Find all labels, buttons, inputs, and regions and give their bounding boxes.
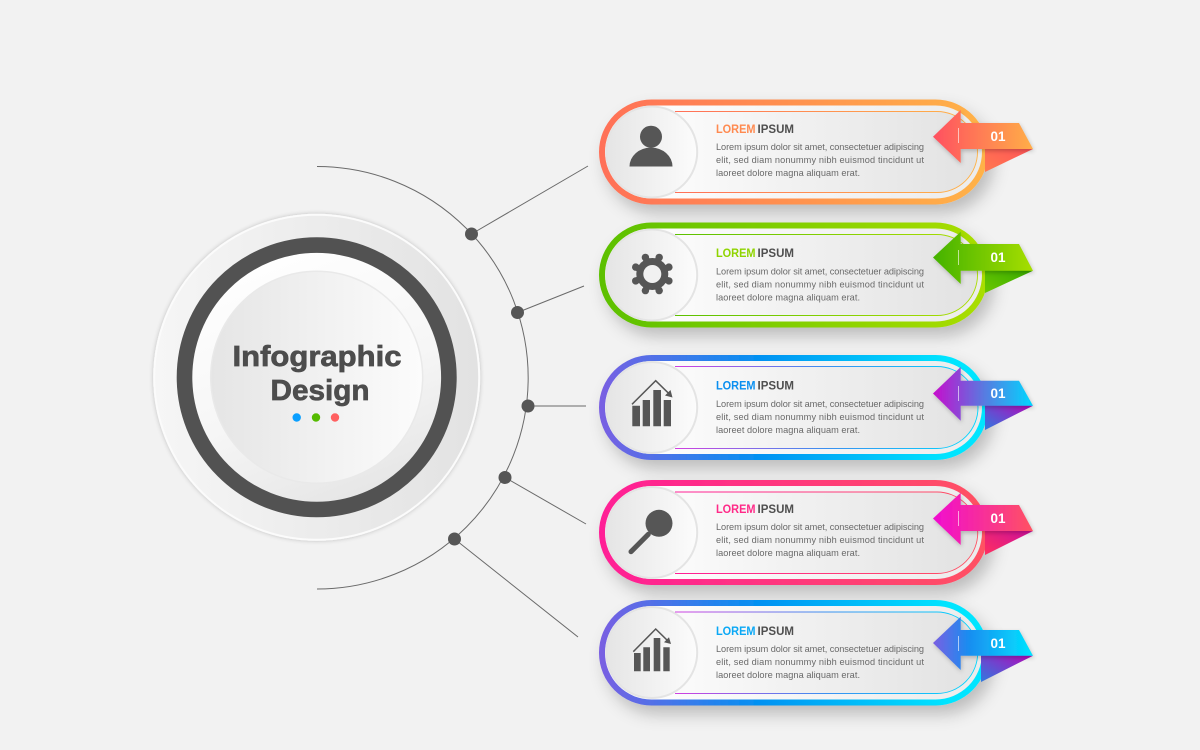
card text: laoreet dolore magna aliquam erat.: [716, 168, 860, 178]
arrow badge: [933, 493, 1033, 555]
heading: Design: [270, 375, 370, 407]
card frame: [599, 355, 988, 460]
card text: laoreet dolore magna aliquam erat.: [716, 425, 860, 435]
connector arc and branches: [317, 166, 588, 637]
arrow badge: [933, 617, 1033, 682]
card frame: [599, 222, 988, 328]
card title: LOREM: [716, 624, 756, 638]
branch lines: [454, 166, 588, 637]
arrow badge: [933, 367, 1033, 430]
card inner: [605, 106, 982, 198]
icon: bar chart: [633, 629, 671, 671]
accent outline: [675, 366, 978, 448]
arrow badge: 01: [990, 511, 1006, 526]
arrow badge: 01: [990, 250, 1006, 265]
dark ring: [185, 245, 449, 510]
card text: elit, sed diam nonummy nibh euismod tincidunt ut: [716, 412, 924, 422]
icon: magnifier: [631, 510, 672, 552]
card inner: [605, 486, 982, 579]
card title: LOREM: [716, 246, 756, 260]
inner disc: [211, 271, 423, 483]
card text: laoreet dolore magna aliquam erat.: [716, 670, 860, 680]
card frame: [599, 480, 988, 585]
icon disc: [606, 362, 697, 453]
icon disc: [606, 487, 697, 578]
outer disc: [154, 215, 479, 540]
panel: card 3: [599, 355, 1033, 460]
card text: elit, sed diam nonummy nibh euismod tincidunt ut: [716, 280, 924, 290]
card title: LOREM: [716, 122, 756, 136]
icon disc: [606, 106, 697, 198]
accent outline: [675, 612, 978, 694]
panel: card 5: [599, 600, 1033, 706]
arrow badge: [933, 232, 1033, 293]
card inner: [605, 228, 982, 322]
icon: bar chart: [632, 381, 672, 426]
card text: elit, sed diam nonummy nibh euismod tincidunt ut: [716, 535, 924, 545]
icon disc: [606, 607, 697, 698]
card title: IPSUM: [758, 122, 794, 136]
dots: [292, 413, 339, 422]
card text: Lorem ipsum dolor sit amet, consectetuer adipiscing: [716, 644, 924, 654]
panel: card 4: [599, 480, 1033, 585]
card text: Lorem ipsum dolor sit amet, consectetuer adipiscing: [716, 522, 924, 532]
card inner: [605, 606, 982, 700]
card title: IPSUM: [758, 502, 794, 516]
central circle: [154, 215, 479, 540]
card title: IPSUM: [758, 624, 794, 638]
arrow badge: 01: [990, 386, 1006, 401]
icon disc: [606, 230, 697, 320]
heading: Infographic: [232, 341, 402, 373]
arrow badge: [933, 110, 1033, 172]
card text: Lorem ipsum dolor sit amet, consectetuer adipiscing: [716, 399, 924, 409]
card text: laoreet dolore magna aliquam erat.: [716, 548, 860, 558]
arrow badge: 01: [990, 636, 1006, 651]
card title: IPSUM: [758, 246, 794, 260]
accent outline: [675, 112, 978, 192]
card text: laoreet dolore magna aliquam erat.: [716, 293, 860, 303]
card title: LOREM: [716, 379, 756, 393]
accent outline: [675, 234, 978, 316]
arc: [317, 166, 528, 589]
card title: LOREM: [716, 502, 756, 516]
nodes: [448, 228, 534, 546]
card text: elit, sed diam nonummy nibh euismod tincidunt ut: [716, 155, 924, 165]
accent outline: [675, 492, 978, 574]
arrow badge: 01: [990, 129, 1006, 144]
card frame: [599, 100, 988, 204]
card text: elit, sed diam nonummy nibh euismod tincidunt ut: [716, 657, 924, 667]
icon: gear: [632, 254, 673, 294]
panel: card 2: [599, 222, 1033, 328]
card text: Lorem ipsum dolor sit amet, consectetuer adipiscing: [716, 267, 924, 277]
card text: Lorem ipsum dolor sit amet, consectetuer adipiscing: [716, 142, 924, 152]
card frame: [599, 600, 988, 706]
card title: IPSUM: [758, 379, 794, 393]
panel: card 1: [599, 100, 1033, 204]
icon: person: [630, 126, 672, 166]
card inner: [605, 361, 982, 454]
